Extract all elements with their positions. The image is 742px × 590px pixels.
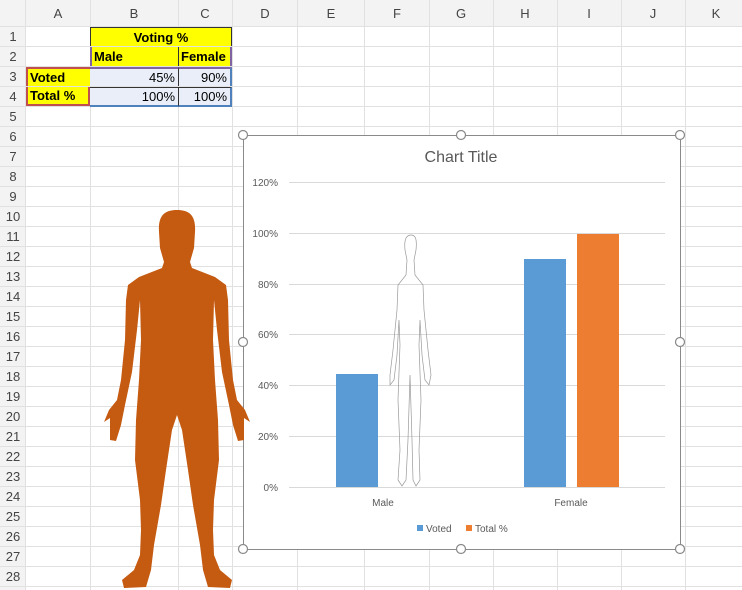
x axis labels: Male: [372, 498, 394, 509]
spreadsheet grid: 18: [6, 369, 20, 384]
spreadsheet grid: 24: [6, 489, 20, 504]
header: Female: [178, 47, 232, 66]
spreadsheet grid: 4: [9, 89, 17, 104]
x axis labels: Female: [554, 498, 588, 509]
spreadsheet grid: 10: [6, 209, 20, 224]
spreadsheet grid: E: [327, 6, 336, 21]
spreadsheet grid: J: [650, 6, 656, 21]
y axis labels: 100%: [252, 229, 278, 240]
y axis labels: 40%: [258, 381, 278, 392]
x axis labels: [372, 498, 588, 509]
row label: Total %: [26, 87, 90, 106]
spreadsheet grid: 27: [6, 549, 20, 564]
row label: Voted: [26, 67, 90, 86]
spreadsheet grid: 2: [9, 49, 17, 64]
values: 45%: [149, 70, 175, 85]
icon: human silhouette: [104, 210, 250, 588]
spreadsheet grid: 3: [9, 69, 17, 84]
bars: [336, 234, 619, 487]
spreadsheet grid: 26: [6, 529, 20, 544]
header: Voting %: [90, 27, 232, 46]
icon: figure outline: [390, 235, 431, 486]
spreadsheet grid: 7: [9, 149, 17, 164]
spreadsheet grid: 16: [6, 329, 20, 344]
header: Female: Female: [181, 49, 226, 64]
spreadsheet grid: 6: [9, 129, 17, 144]
spreadsheet grid: 17: [6, 349, 20, 364]
row label: Total %: Total %: [30, 88, 75, 103]
spreadsheet grid: 25: [6, 509, 20, 524]
legend: Voted: [426, 524, 452, 535]
spreadsheet grid: 14: [6, 289, 20, 304]
spreadsheet grid: A: [54, 6, 63, 21]
spreadsheet grid: 9: [9, 189, 17, 204]
data table: 90%: [201, 70, 227, 85]
spreadsheet grid: 11: [6, 229, 20, 244]
y axis labels: 120%: [252, 178, 278, 189]
y axis labels: [252, 178, 278, 494]
spreadsheet grid: I: [587, 6, 591, 21]
spreadsheet grid: 20: [6, 409, 20, 424]
spreadsheet grid: D: [260, 6, 270, 21]
spreadsheet grid: B: [130, 6, 138, 21]
spreadsheet grid: 13: [6, 269, 20, 284]
spreadsheet grid: 5: [9, 109, 17, 124]
row label: Voted: Voted: [30, 70, 65, 85]
header: Voting %: Voting %: [134, 30, 188, 45]
spreadsheet grid: 21: [6, 429, 20, 444]
data table: [26, 27, 232, 107]
data table: 100%: [142, 89, 175, 104]
spreadsheet grid: C: [200, 6, 210, 21]
spreadsheet grid: 19: [6, 389, 20, 404]
spreadsheet grid: K: [712, 6, 721, 21]
spreadsheet grid: 23: [6, 469, 20, 484]
spreadsheet grid: G: [456, 6, 466, 21]
spreadsheet grid: 28: [6, 569, 20, 584]
spreadsheet grid: 1: [9, 29, 17, 44]
header: Male: [90, 47, 178, 66]
chart title: Chart Title: [425, 149, 498, 166]
header: Male: Male: [94, 49, 123, 64]
selection handles: [238, 130, 684, 554]
y axis labels: 20%: [258, 432, 278, 443]
y axis labels: 0%: [264, 483, 278, 494]
y axis labels: 80%: [258, 280, 278, 291]
spreadsheet grid: 22: [6, 449, 20, 464]
spreadsheet grid: 12: [6, 249, 20, 264]
spreadsheet grid: 8: [9, 169, 17, 184]
values: [90, 67, 178, 86]
data table: 100%: [194, 89, 227, 104]
y axis labels: 60%: [258, 330, 278, 341]
spreadsheet grid: H: [520, 6, 530, 21]
spreadsheet grid: 15: [6, 309, 20, 324]
spreadsheet grid: F: [393, 6, 401, 21]
legend: [417, 524, 508, 535]
legend: Total %: [475, 524, 508, 535]
